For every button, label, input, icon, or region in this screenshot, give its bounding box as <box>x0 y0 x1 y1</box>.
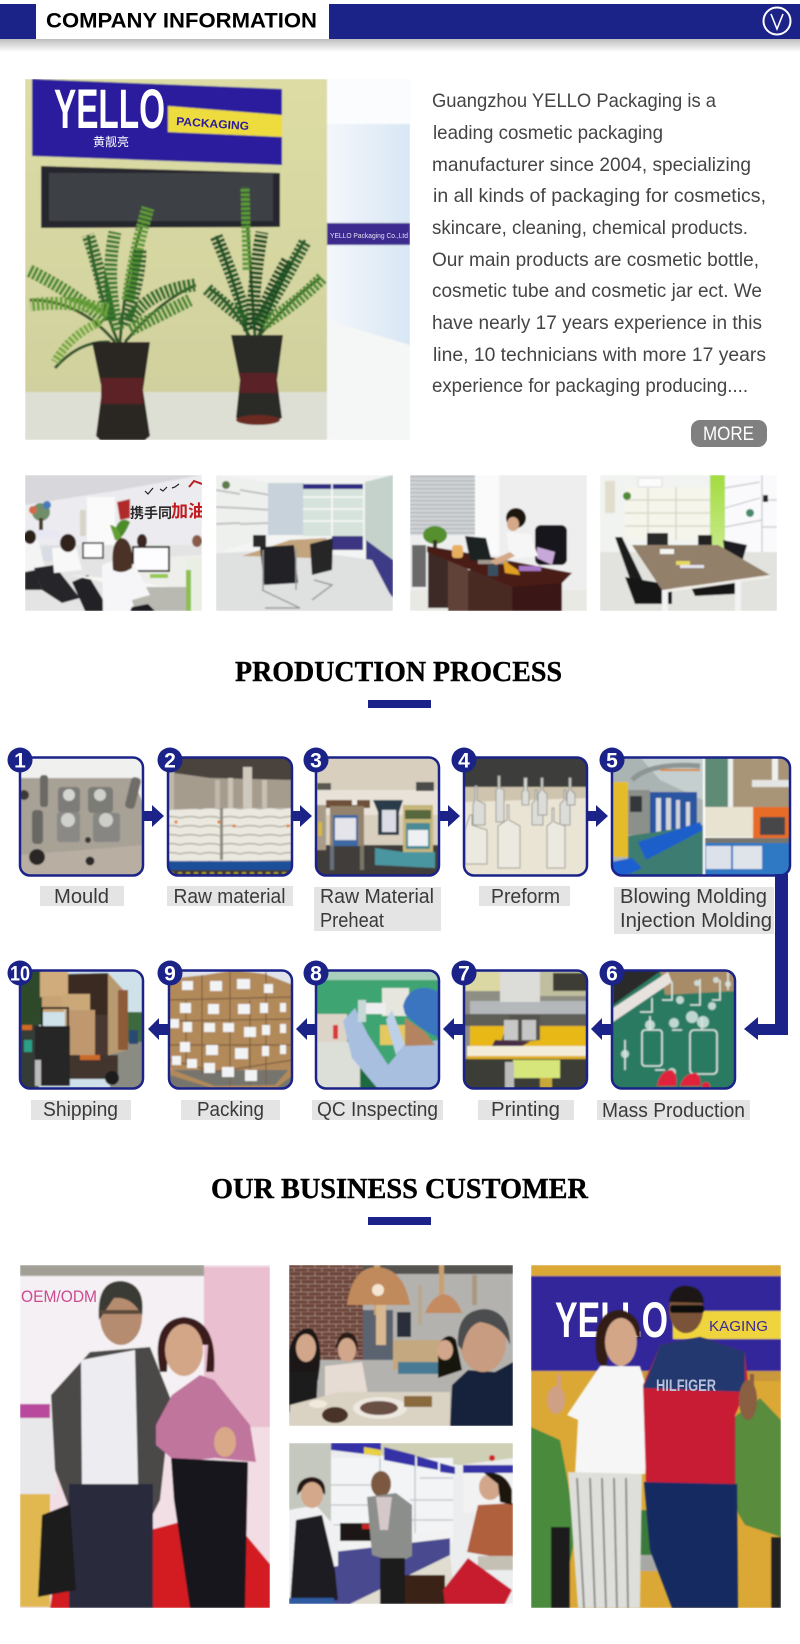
arrow 6 to 7 <box>591 1018 612 1040</box>
photo: office staff at desks: 加油 <box>171 502 205 521</box>
button: more <box>691 420 767 447</box>
photo: meeting room with display shelves <box>216 475 393 611</box>
photo: customer dinner at restaurant <box>289 1265 513 1426</box>
step badges row 1: 5 <box>606 750 618 772</box>
labels row 2: Packing <box>197 1099 264 1121</box>
labels row 1: Preform <box>491 886 560 908</box>
photo: customer at trade show booth <box>20 1265 270 1608</box>
step badges row 2: 7 <box>458 962 470 986</box>
labels row 1: Raw material <box>174 886 286 908</box>
photo: customer at trade show booth: OEM/ODM <box>21 1287 97 1306</box>
labels row 1 <box>40 886 774 934</box>
photo: customer with YELLO sign, thumbs up: HILFIGER <box>656 1376 716 1395</box>
step badges row 2: 6 <box>606 962 618 986</box>
step badges row 1 <box>8 748 624 772</box>
labels row 1: Blowing Molding <box>620 886 767 908</box>
step 9: packing <box>168 970 293 1089</box>
heading underline <box>368 700 431 708</box>
step 8: QC inspecting <box>315 970 440 1089</box>
photo: employee at office desk <box>410 475 587 611</box>
step 10: shipping <box>19 970 144 1089</box>
button: more: MORE <box>703 424 754 445</box>
labels row 2: QC Inspecting <box>317 1099 438 1121</box>
photo: customer with YELLO sign, thumbs up <box>531 1265 781 1608</box>
arrow: step 5 down to step 6 <box>744 874 788 1040</box>
step badges row 2: 10 <box>10 962 30 986</box>
photo: conference table <box>600 475 777 611</box>
photo: office entrance with YELLO sign and plants: PACKAGING <box>176 116 249 133</box>
labels row 1: Injection Molding <box>620 910 772 932</box>
heading: our business customer: OUR BUSINESS CUSTOMER <box>211 1173 589 1205</box>
photo: office entrance with YELLO sign and plants: YELLO Packaging Co.,Ltd <box>330 233 408 240</box>
step 7: printing <box>463 970 588 1089</box>
text block: company description: manufacturer since 2004, specializing <box>432 154 751 176</box>
text block: company description: in all kinds of packaging for cosmetics, <box>433 185 766 207</box>
step 5: blowing and injection molding <box>611 757 791 876</box>
text block: company description: skincare, cleaning, chemical products. <box>432 217 748 239</box>
arrow 1 to 2 <box>144 805 164 827</box>
heading: company information: COMPANY INFORMATION <box>46 8 317 32</box>
photo: office entrance with YELLO sign and plants <box>25 77 410 440</box>
text block: company description: Guangzhou YELLO Packaging is a <box>432 90 716 112</box>
arrow 4 to 5 <box>588 805 608 827</box>
labels row 2 <box>31 1099 750 1122</box>
arrow 7 to 8 <box>443 1018 463 1040</box>
heading: production process: PRODUCTION PROCESS <box>235 656 562 688</box>
text block: company description: Our main products are cosmetic bottle, <box>432 249 759 271</box>
step 6: mass production <box>611 970 736 1090</box>
arrow 8 to 9 <box>296 1018 316 1040</box>
labels row 2: Printing <box>491 1099 560 1121</box>
text block: company description: cosmetic tube and cosmetic jar ect. We <box>432 280 762 302</box>
header band: company information <box>0 4 800 52</box>
step badges row 2: 9 <box>164 962 176 986</box>
photo: office entrance with YELLO sign and plants: 黄靓亮 <box>93 134 129 149</box>
labels row 2: Mass Production <box>602 1100 745 1122</box>
step badges row 1: 3 <box>310 750 322 772</box>
arrow 2 to 3 <box>292 805 312 827</box>
step 4: preform <box>463 757 588 876</box>
photo: customer with YELLO sign, thumbs up: YELLO <box>555 1292 668 1348</box>
labels row 1: Mould <box>54 886 109 908</box>
text block: company description <box>432 90 766 397</box>
photo: office staff at desks: 携手同 <box>130 505 172 521</box>
icon: chevron circle <box>764 8 790 34</box>
labels row 1: Raw Material <box>320 886 434 908</box>
step 1: mould <box>19 757 144 876</box>
step 2: raw material <box>167 757 293 876</box>
step badges row 1: 1 <box>14 750 26 772</box>
labels row 1: Preheat <box>320 910 384 932</box>
text block: company description: leading cosmetic packaging <box>433 122 663 144</box>
labels row 2: Shipping <box>43 1099 118 1121</box>
photo: office staff at desks <box>24 475 205 611</box>
step badges row 1: 4 <box>458 750 470 772</box>
text block: company description: experience for packaging producing.... <box>432 375 748 397</box>
photo: customer receiving gift in showroom <box>289 1443 513 1604</box>
photo: office entrance with YELLO sign and plants: YELLO <box>54 77 165 140</box>
arrow 9 to 10 <box>148 1018 168 1040</box>
photo: customer with YELLO sign, thumbs up: KAGING <box>709 1318 768 1335</box>
step badges row 1: 2 <box>164 750 176 772</box>
step 3: raw material preheat <box>315 757 440 876</box>
step badges row 2: 8 <box>310 962 322 986</box>
step badges row 2 <box>8 960 624 986</box>
text block: company description: have nearly 17 years experience in this <box>432 312 762 334</box>
heading underline <box>368 1217 431 1225</box>
arrow 3 to 4 <box>439 805 460 827</box>
text block: company description: line, 10 technicians with more 17 years <box>433 344 766 366</box>
